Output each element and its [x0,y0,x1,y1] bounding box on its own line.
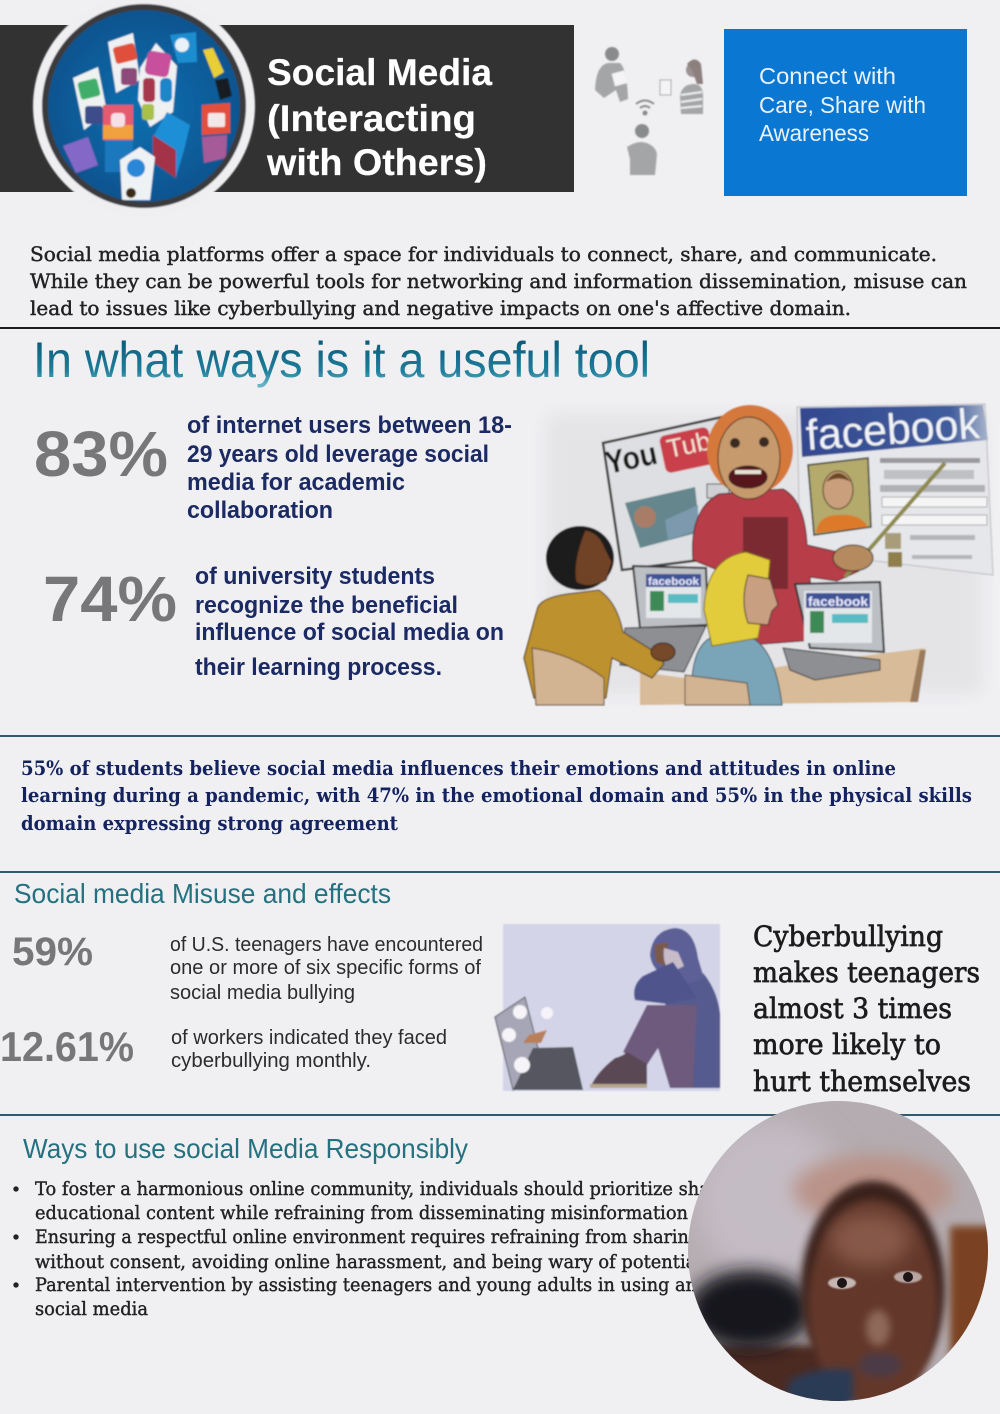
stat: 59%: 59% [12,930,93,974]
callout: cyberbullying: hurt themselves [753,1065,971,1098]
bullet list: without consent, avoiding online harassment, and being wary of potential [35,1252,702,1273]
stat: 59%: of U.S. teenagers have encountered [170,934,483,956]
left laptop: facebook [648,576,700,588]
facebook page: facebook [804,400,982,460]
left chair [532,648,604,705]
bullet list: To foster a harmonious online community, individuals should prioritize sharing [35,1179,747,1200]
stat: 74%: their learning process. [195,654,442,681]
callout: cyberbullying: almost 3 times [753,992,952,1025]
student right [692,552,782,705]
bullet list [14,1179,747,1320]
stat: 12.61%: cyberbullying monthly. [171,1050,371,1072]
stat: 74% [43,563,504,681]
stat: 74%: 74% [43,563,177,635]
youtube page [602,417,790,570]
teacher [693,405,945,645]
illustration: teacher with students at laptops [524,400,993,705]
right laptop: facebook [808,594,869,609]
icon: people connected by wifi [595,47,703,175]
stat: 83%: media for academic [187,469,405,496]
bullet list: social media [35,1299,148,1320]
stat: 83%: 83% [34,418,168,490]
heading: use responsibly: Ways to use social Media Responsibly [23,1133,468,1164]
stat: 83% [34,412,512,524]
text block: 55% of students: domain expressing strong agreement [21,811,399,835]
stat: 83%: of internet users between 18- [187,412,512,439]
callout: cyberbullying: more likely to [753,1028,941,1061]
bullet list: Ensuring a respectful online environment requires refraining from sharing [35,1227,700,1248]
desk [640,648,926,705]
stat: 12.61%: of workers indicated they faced [171,1027,447,1049]
callout: connect with care [724,29,967,196]
intro text block: lead to issues like cyberbullying and negative impacts on one's affective domain. [30,297,851,320]
illustration: sad teen with laptop [495,924,720,1091]
header banner [0,0,574,217]
stat: 74%: recognize the beneficial [195,592,458,619]
text block: 55% of students: 55% of students believe social media influences their emotions and attitudes in online [21,756,896,780]
stat: 59%: social media bullying [170,982,355,1004]
center chair [685,675,750,705]
title: (Interacting [267,97,476,139]
bullet list: Parental intervention by assisting teenagers and young adults in using an [35,1275,697,1296]
title: Social Media [267,51,493,93]
stat: 12.61% [0,1023,447,1072]
icon: social media cubes [33,0,255,217]
intro text block: Social media platforms offer a space for individuals to connect, share, and communicate. [30,243,937,266]
presenter webcam photo [688,1101,988,1401]
stat: 59% [12,930,483,1004]
stat: 59%: one or more of six specific forms of [170,957,481,979]
heading: useful tool: In what ways is it a useful tool [33,332,650,388]
right laptop [783,582,884,680]
heading: misuse and effects: Social media Misuse and effects [14,878,391,909]
callout: cyberbullying: Cyberbullying [753,920,943,953]
title: with Others) [266,141,487,183]
stat: 83%: collaboration [187,497,333,524]
stat: 74%: influence of social media on [195,619,504,646]
facebook page [797,400,993,575]
callout: connect with care: Connect with [759,63,896,89]
callout: connect with care: Awareness [759,120,869,146]
callout: connect with care: Care, Share with [759,92,926,118]
youtube page: Tub [664,425,713,464]
left laptop [620,566,708,672]
bullet list: educational content while refraining from disseminating misinformation [35,1203,688,1224]
stat: 12.61%: 12.61% [0,1023,134,1070]
intro text block: While they can be powerful tools for networking and information dissemination, misuse can [30,270,967,293]
youtube page: You [602,435,660,481]
stat: 74%: of university students [195,563,435,590]
stat: 83%: 29 years old leverage social [187,441,489,468]
student left [524,526,675,698]
callout: cyberbullying: makes teenagers [753,956,980,989]
